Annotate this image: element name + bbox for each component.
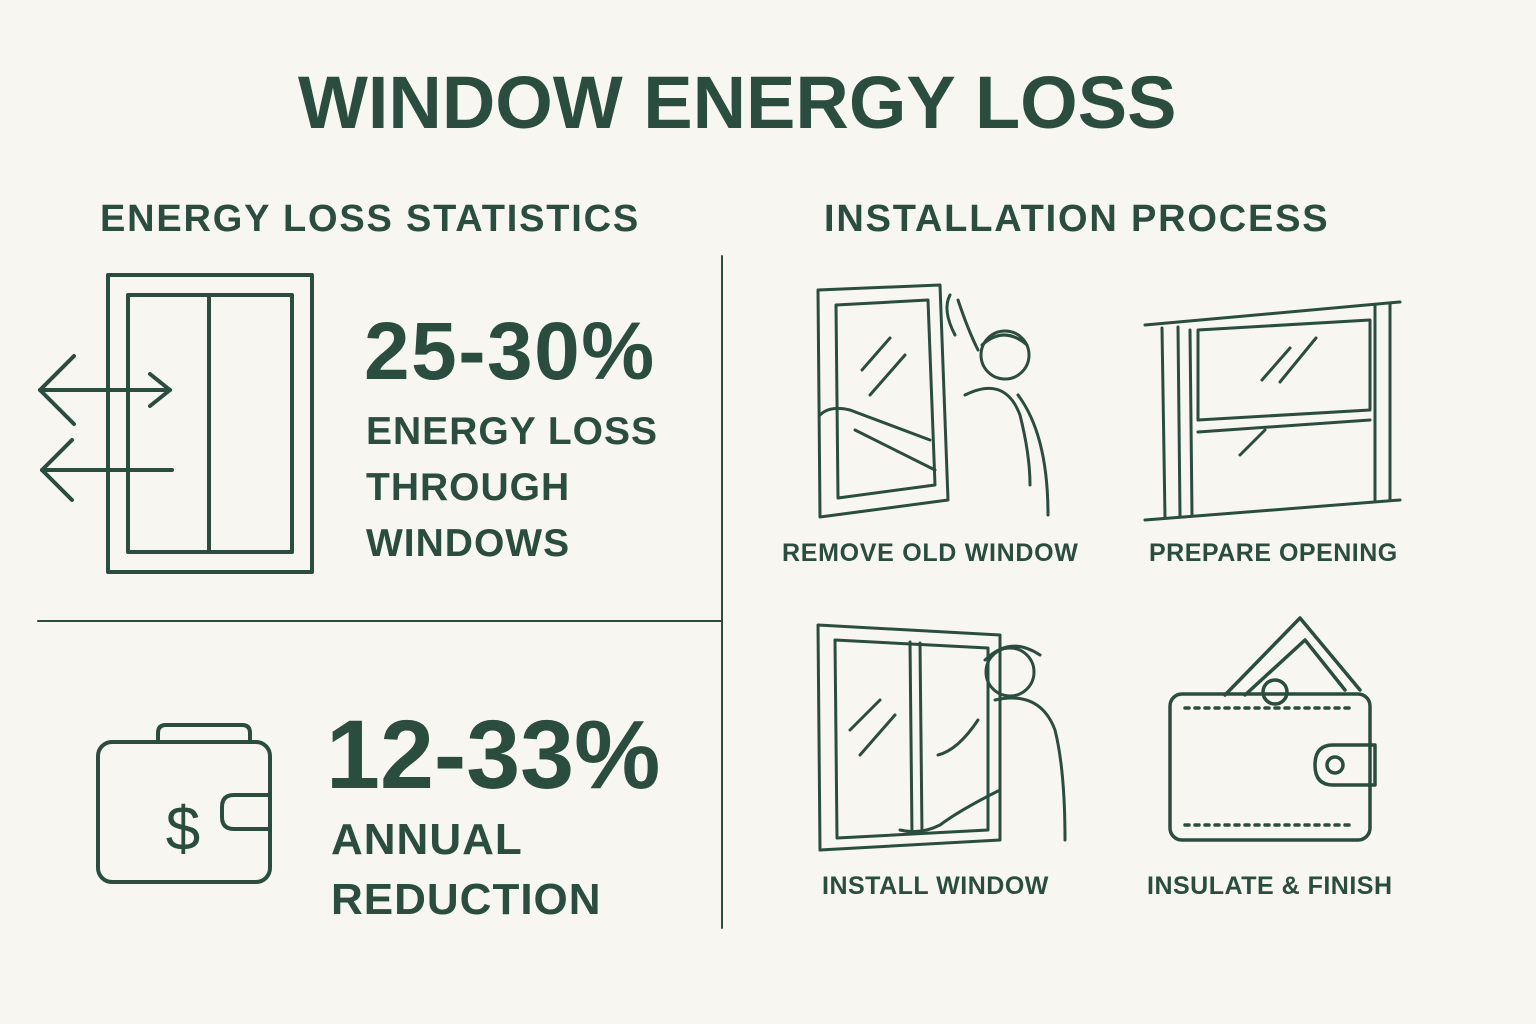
stat 1 label: THROUGH bbox=[366, 466, 570, 509]
stat 1 label: WINDOWS bbox=[366, 522, 570, 565]
caption: insulate & finish: INSULATE & FINISH bbox=[1147, 872, 1393, 900]
stat 1 label: ENERGY LOSS bbox=[366, 410, 658, 453]
heading: energy loss statistics: ENERGY LOSS STATISTICS bbox=[100, 198, 640, 240]
stat 1 label bbox=[366, 410, 658, 565]
heading: installation process: INSTALLATION PROCESS bbox=[824, 198, 1329, 240]
icon: remove old window bbox=[818, 285, 1048, 517]
stat 1 number: 25-30% bbox=[364, 306, 656, 397]
stat 2 number: 12-33% bbox=[326, 700, 660, 809]
icon: wallet with cash bbox=[1170, 618, 1375, 840]
icon: window with heat arrows bbox=[40, 275, 312, 572]
stat 2 label: REDUCTION bbox=[331, 875, 602, 924]
stat 2 label: ANNUAL bbox=[331, 815, 523, 864]
icon: prepare opening bbox=[1145, 302, 1400, 520]
icon: install window bbox=[818, 625, 1065, 850]
icon: wallet dollar: $ bbox=[166, 795, 200, 864]
caption: prepare opening: PREPARE OPENING bbox=[1149, 539, 1398, 567]
icon: wallet dollar bbox=[98, 725, 270, 882]
caption: install window: INSTALL WINDOW bbox=[822, 872, 1049, 900]
title: WINDOW ENERGY LOSS bbox=[298, 61, 1176, 144]
caption: remove old window: REMOVE OLD WINDOW bbox=[782, 539, 1079, 567]
stat 2 label bbox=[331, 815, 602, 924]
